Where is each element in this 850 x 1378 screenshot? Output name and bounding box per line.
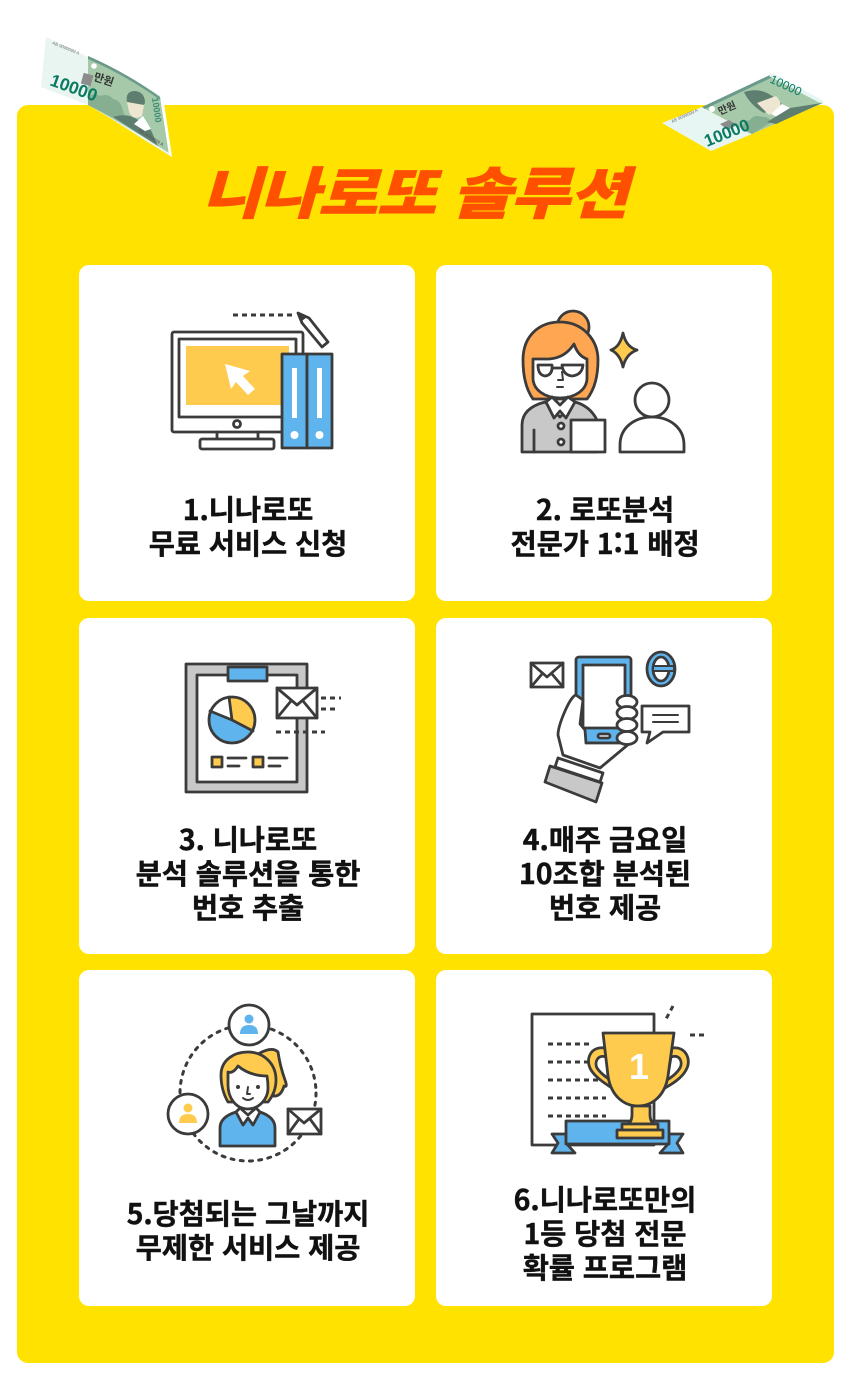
- text: step 4: 10조합 분석된: [519, 852, 691, 893]
- title: 니나로또 솔루션: [196, 150, 646, 230]
- icon: trophy with ribbon and paper: 1: [629, 1046, 649, 1087]
- text: step 5: [127, 1192, 369, 1267]
- banknote: top right: 만원: [715, 97, 738, 118]
- text: step 2: [510, 488, 699, 563]
- text: step 4: 4.매주 금요일: [523, 818, 687, 859]
- banknote: top right: 10000: [701, 115, 752, 151]
- text: step 2: 2. 로또분석: [536, 488, 674, 529]
- text: step 4: 번호 제공: [549, 886, 661, 927]
- banknote: top left: AB 9099099 A: [52, 40, 80, 56]
- icon: consultant and client: [520, 310, 686, 454]
- icon: clipboard with pie chart and envelope: [184, 662, 341, 794]
- banknote: top right: 10000: [768, 72, 804, 99]
- text: step 5: 무제한 서비스 제공: [136, 1226, 360, 1267]
- text: step 3: 3. 니나로또: [179, 818, 317, 859]
- text: step 6: 6.니나로또만의: [514, 1178, 696, 1219]
- text: step 3: 번호 추출: [192, 886, 304, 927]
- panel: card 5 unlimited service: [79, 970, 415, 1306]
- banknote: top left: 10000: [150, 97, 163, 123]
- banknote: top left: 만원: [92, 69, 116, 90]
- icon: woman with contacts circle: [166, 1004, 322, 1162]
- text: step 1: 무료 서비스 신청: [149, 522, 347, 563]
- icon: trophy with ribbon and paper: [530, 1005, 704, 1154]
- text: step 2: 전문가 1:1 배정: [510, 522, 699, 563]
- banknote: top left: [41, 37, 172, 157]
- text: step 4: [519, 818, 691, 927]
- banknote: top right: AB 9099099 A: [670, 108, 699, 124]
- text: step 1: 1.니나로또: [183, 488, 313, 529]
- text: step 3: [136, 818, 360, 927]
- text: step 6: 확률 프로그램: [523, 1246, 687, 1287]
- banknote: top right: [662, 72, 824, 151]
- text: step 5: 5.당첨되는 그날까지: [127, 1192, 369, 1233]
- panel: card 2 expert matching: [436, 265, 772, 601]
- icon: monitor, binders and pencil: [170, 312, 334, 450]
- panel: card 4 weekly numbers: [436, 618, 772, 954]
- text: step 6: 1등 당첨 전문: [523, 1212, 687, 1253]
- banknote: top left: AB 9099099 A: [137, 128, 165, 147]
- text: step 6: [514, 1178, 696, 1287]
- panel: card 6 winning program: [436, 970, 772, 1306]
- icon: hand holding smartphone: [530, 650, 690, 804]
- panel: card 1 free service: [79, 265, 415, 601]
- banknote: top left: 10000: [48, 70, 100, 105]
- panel: card 3 analysis: [79, 618, 415, 954]
- text: step 1: [149, 488, 347, 563]
- text: step 3: 분석 솔루션을 통한: [136, 852, 360, 893]
